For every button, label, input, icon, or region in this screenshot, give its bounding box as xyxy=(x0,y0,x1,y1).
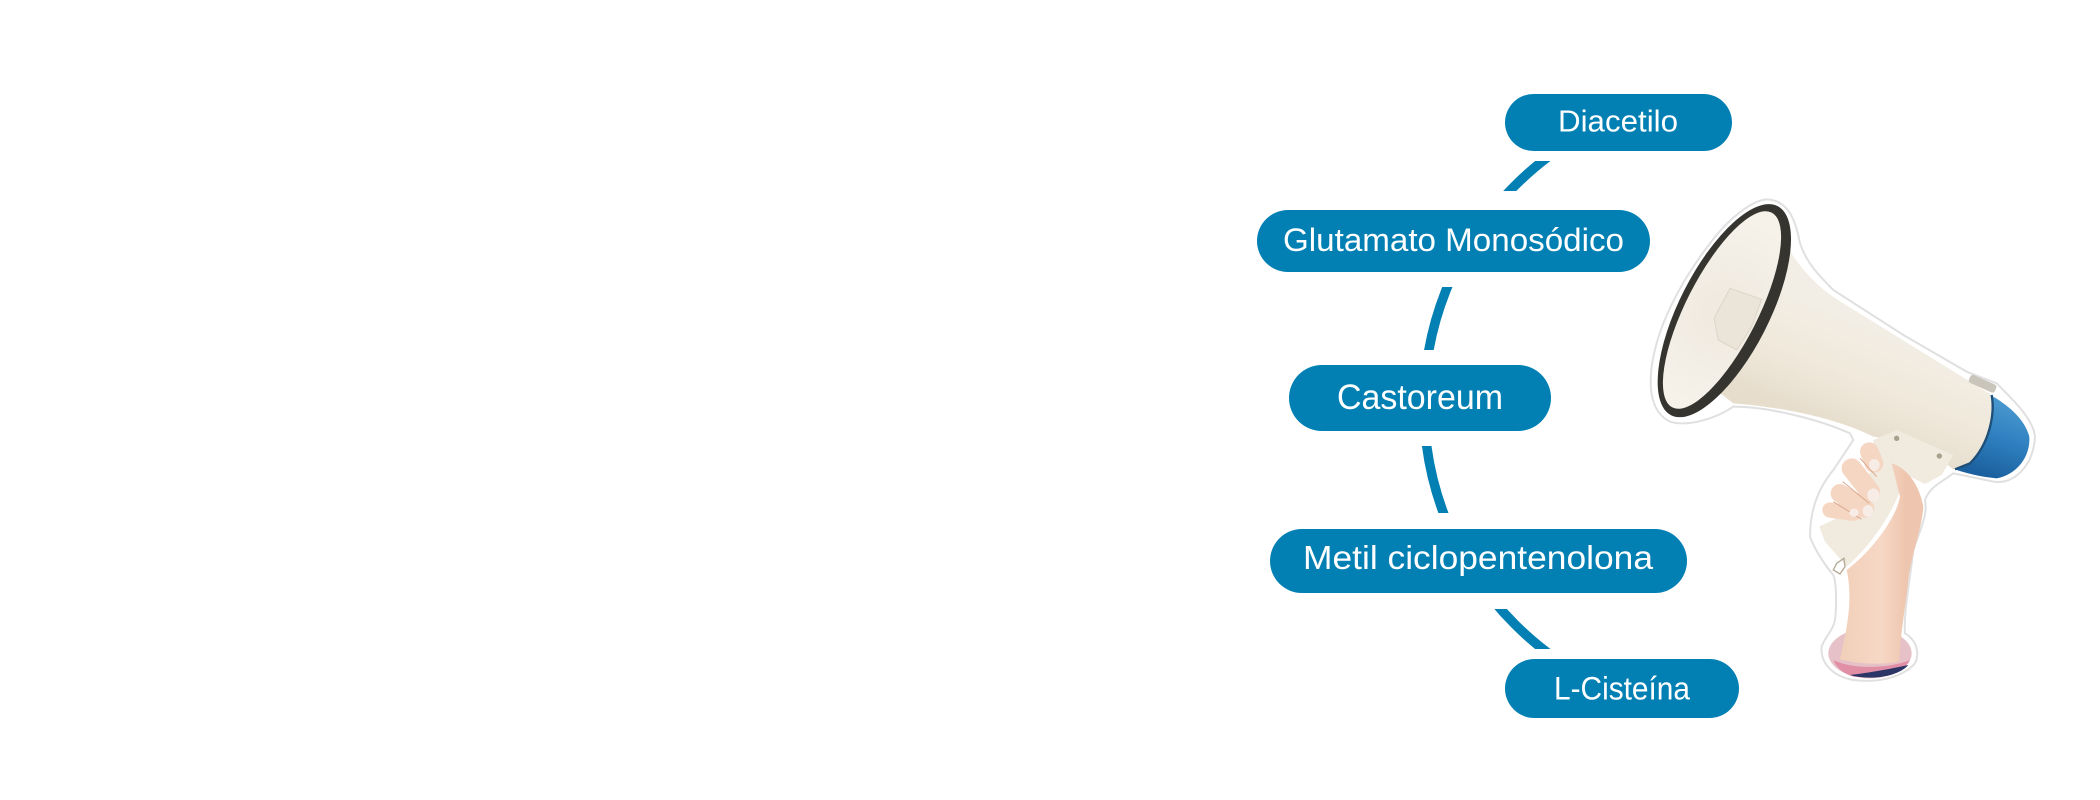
speaker inner cone xyxy=(1640,196,1804,424)
pill: Castoreum: Castoreum xyxy=(1337,378,1503,417)
blue end cap xyxy=(1955,397,2029,478)
horn body xyxy=(1703,248,1993,469)
pill: L-Cisteína xyxy=(1505,659,1739,718)
pill: Diacetilo: Diacetilo xyxy=(1558,104,1678,138)
pill: Metil ciclopentenolona xyxy=(1270,529,1687,593)
arm and palm xyxy=(1840,463,1923,664)
megaphone rim xyxy=(1631,186,1818,436)
connector arcs xyxy=(1422,161,1550,649)
fingernails xyxy=(1849,459,1880,517)
finger creases xyxy=(1833,458,1877,519)
pill: Metil ciclopentenolona: Metil ciclopentenolona xyxy=(1303,539,1654,576)
pill: Castoreum xyxy=(1289,365,1551,431)
sticker outline xyxy=(1651,199,2035,681)
bracket screws xyxy=(1894,374,1997,459)
pill: Diacetilo xyxy=(1505,94,1732,151)
icon: megaphone held by a hand xyxy=(1631,186,2035,681)
handle xyxy=(1819,430,1953,567)
cap joint shadow xyxy=(1955,395,1993,469)
metal ring xyxy=(1833,558,1845,574)
driver unit in cone xyxy=(1714,288,1762,350)
pill: L-Cisteína: L-Cisteína xyxy=(1554,670,1690,706)
pill: Glutamato Monosódico: Glutamato Monosódico xyxy=(1283,222,1624,258)
pill: Glutamato Monosódico xyxy=(1257,210,1650,272)
fingers xyxy=(1830,452,1874,513)
hole at wrist xyxy=(1828,628,1912,678)
